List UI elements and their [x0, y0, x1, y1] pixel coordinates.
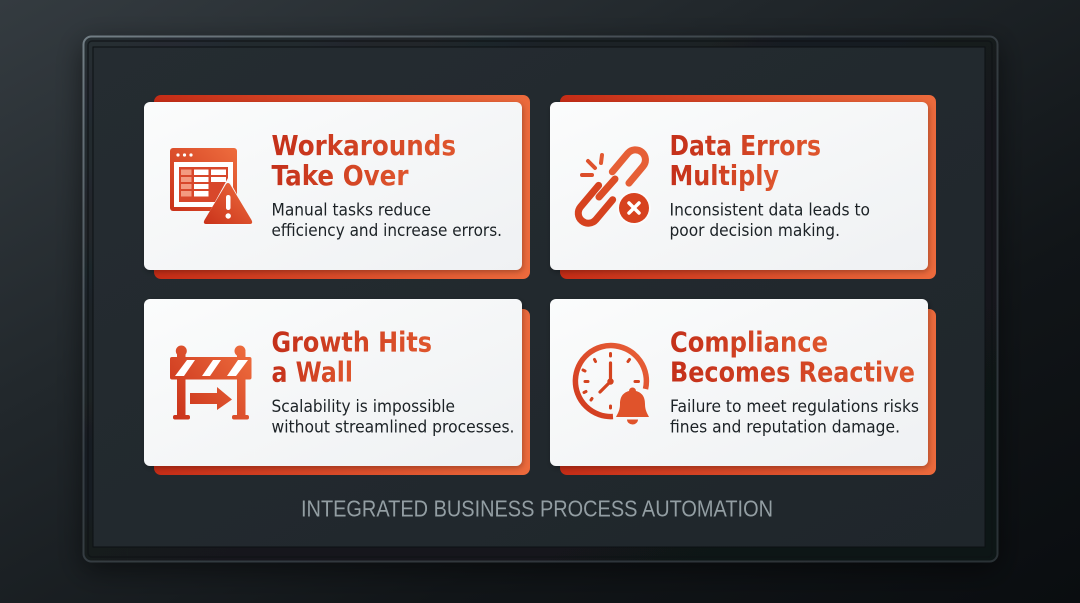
footer caption: INTEGRATED BUSINESS PROCESS AUTOMATION [301, 496, 773, 522]
heading: Becomes Reactive [670, 356, 915, 388]
body text: poor decision making. [670, 221, 840, 241]
body text [272, 397, 514, 438]
heading: Data Errors [670, 130, 821, 162]
heading: Growth Hits [272, 326, 432, 358]
heading [670, 326, 915, 388]
body text: Inconsistent data leads to [670, 200, 870, 220]
icon: broken chain link with x badge [574, 146, 651, 227]
heading: a Wall [272, 356, 353, 388]
icon: spreadsheet window with warning triangle [170, 148, 254, 226]
body text: without streamlined processes. [272, 418, 514, 438]
panel: workarounds take over [144, 95, 530, 279]
body text [272, 200, 502, 241]
body text [670, 397, 919, 438]
panel: data errors multiply [550, 95, 936, 279]
panel: compliance becomes reactive [550, 299, 936, 475]
heading [670, 130, 821, 192]
heading: Workarounds [272, 130, 456, 162]
heading: Multiply [670, 160, 779, 192]
body text: fines and reputation damage. [670, 418, 900, 438]
body text: efficiency and increase errors. [272, 221, 502, 241]
body text: Manual tasks reduce [272, 200, 431, 220]
heading [272, 130, 456, 192]
heading: Compliance [670, 326, 828, 358]
monitor frame [84, 36, 998, 562]
body text [670, 200, 870, 241]
icon: clock with alarm bell [575, 346, 649, 424]
heading [272, 326, 432, 388]
body text: Scalability is impossible [272, 397, 455, 417]
panel: growth hits a wall [144, 299, 530, 475]
icon: road barricade with arrow [170, 346, 252, 420]
body text: Failure to meet regulations risks [670, 397, 919, 417]
heading: Take Over [272, 160, 409, 192]
